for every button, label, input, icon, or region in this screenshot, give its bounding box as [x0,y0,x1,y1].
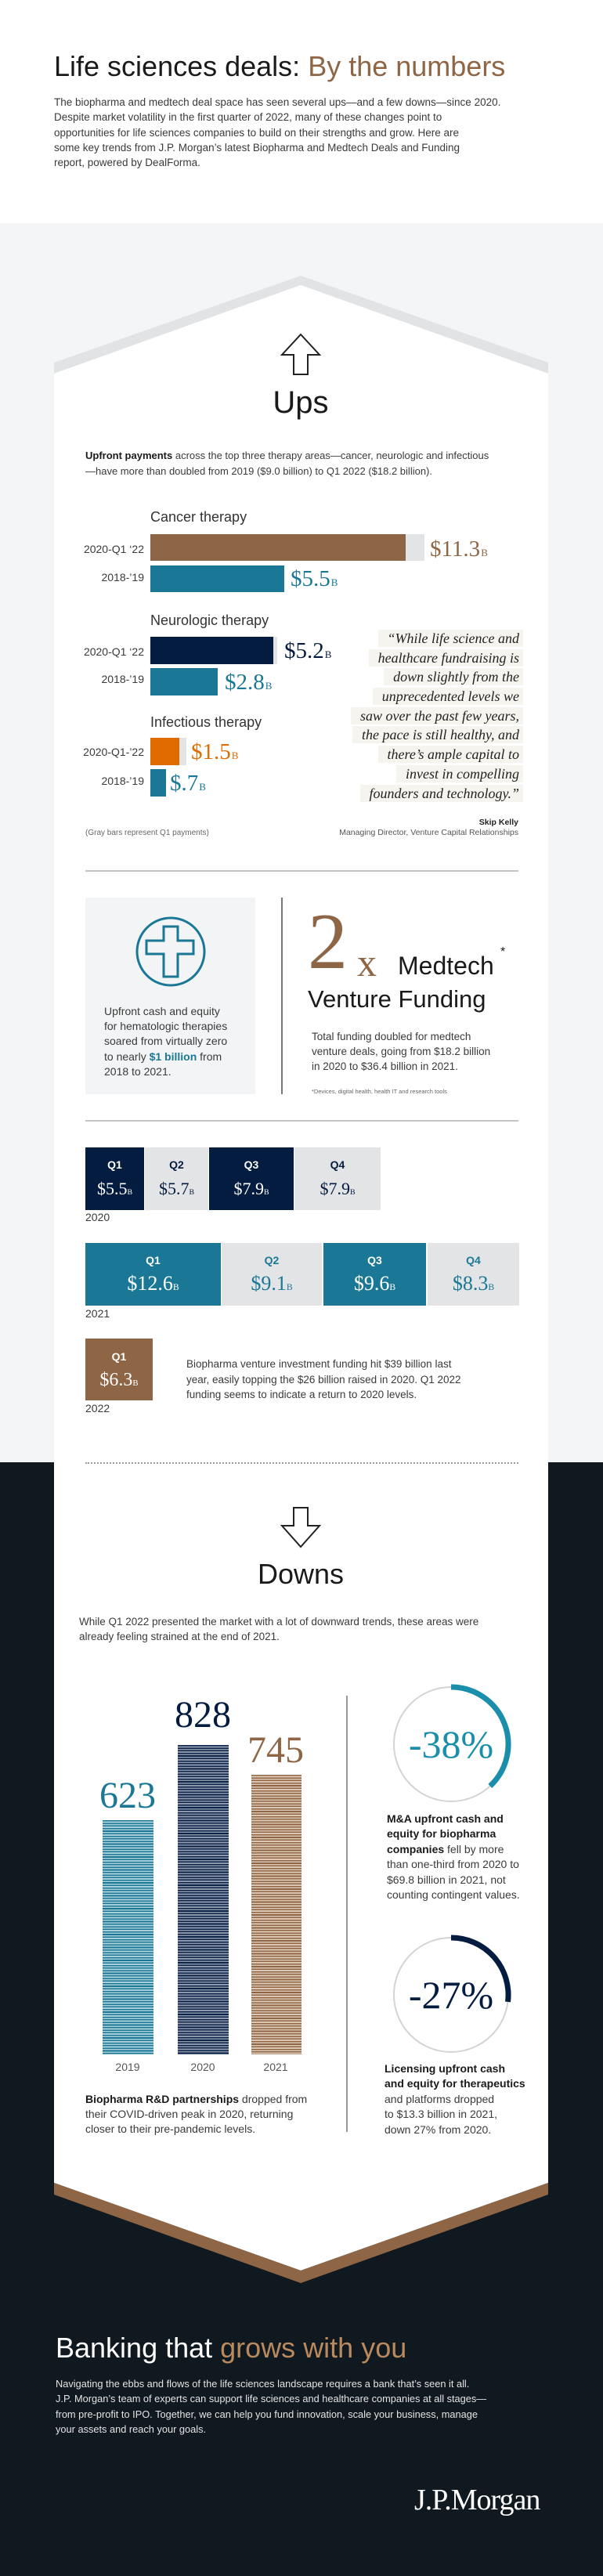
text: licensing upfront: and platforms dropped [385,2093,494,2105]
quote: unprecedented levels we [382,688,519,704]
bar chart: R&D partnerships: 623 [99,1775,156,1816]
text: licensing upfront [385,2062,525,2136]
footer paragraph: J.P. Morgan’s team of experts can support life sciences and healthcare companies at all stages— [56,2393,486,2404]
text: $11.3B [430,537,488,562]
note: gray bars: (Gray bars represent Q1 payments) [85,829,209,837]
label: 2021: 2021 [85,1307,110,1320]
callout: 2x medtech venture funding: Medtech [398,952,494,980]
bar chart: therapy upfront payments: 2018-’19 [102,775,144,787]
text: licensing upfront: Licensing upfront cash [385,2062,505,2075]
chart: 2021 quarterly funding: $9.1B [251,1272,293,1295]
text: M&A upfront [387,1812,520,1901]
chart: -27% ring: -27% [409,1973,493,2017]
callout: 2x medtech venture funding: venture deals, going from $18.2 billion [312,1046,490,1057]
callout: 2x medtech venture funding [308,898,505,1095]
label: 2022: 2022 [85,1402,110,1414]
text: hematologic: Upfront cash and equity [104,1005,220,1017]
callout: 2x medtech venture funding: Venture Funding [308,985,486,1013]
quote: saw over the past few years, [360,708,519,724]
bar chart: R&D partnerships: 2019 [115,2061,140,2073]
quote attribution: Managing Director, Venture Capital Relationships [339,828,518,837]
text: biopharma R&D partnerships: their COVID-driven peak in 2020, returning [85,2108,293,2120]
chart: 2022 Q1: $6.3B [99,1370,139,1390]
text: licensing upfront: down 27% from 2020. [385,2123,491,2136]
callout: 2x medtech venture funding: *Devices, digital health, health IT and research tools [312,1088,447,1095]
bar chart: therapy upfront payments: $2.8B [225,670,272,695]
intro paragraph [54,96,500,168]
bar chart: therapy upfront payments: 2020-Q1 ‘22 [84,543,144,555]
heading: Ups: Ups [273,385,329,420]
intro paragraph: The biopharma and medtech deal space has seen several ups—and a few downs—since 2020. [54,96,500,108]
text: hematologic: soared from virtually zero [104,1035,227,1047]
text: M&A upfront: equity for biopharma [387,1827,496,1840]
quote attribution: Skip Kelly [479,818,518,827]
text: biopharma R&D partnerships: closer to their pre-pandemic levels. [85,2123,255,2135]
text: biopharma venture funding: funding seems to indicate a return to 2020 levels. [186,1389,417,1400]
chart: -27% ring [393,1935,511,2053]
label: cancer therapy: Cancer therapy [150,509,247,525]
heading: Downs: Downs [258,1558,344,1590]
chart: 2022 Q1: Q1 [112,1350,126,1363]
text: biopharma venture funding [186,1358,460,1400]
chart: 2021 quarterly funding [85,1243,519,1306]
text: biopharma venture funding: Biopharma venture investment funding hit $39 billion last [186,1358,451,1370]
label: infectious therapy: Infectious therapy [150,714,262,730]
label: 2020: 2020 [85,1211,110,1223]
footer paragraph [56,2378,487,2435]
text: hematologic: 2018 to 2021. [104,1065,172,1078]
chart: 2021 quarterly funding: $12.6B [127,1272,179,1295]
chart: 2020 quarterly funding: $5.7B [159,1179,194,1198]
chart: 2021 quarterly funding: $8.3B [453,1272,494,1295]
bar chart: R&D partnerships: 2021 [263,2061,288,2073]
chart: 2020 quarterly funding: Q1 [107,1158,122,1171]
chart: 2020 quarterly funding: Q4 [330,1158,345,1171]
text: hematologic: for hematologic therapies [104,1020,227,1032]
chart: 2020 quarterly funding: $5.5B [97,1179,132,1198]
bar chart: therapy upfront payments: 2020-Q1-’22 [83,746,144,758]
text: M&A upfront: than one-third from 2020 to [387,1858,519,1870]
bar chart: therapy upfront payments: $5.5B [291,566,338,591]
text: hematologic: to nearly $1 billion from [104,1050,222,1063]
chart: -38% ring [393,1684,511,1802]
chart: 2020 quarterly funding: $7.9B [233,1179,269,1198]
intro paragraph: opportunities for life sciences companies to build on their strengths and grow. Here are [54,127,459,139]
quote: there’s ample capital to [388,746,519,762]
bar chart: therapy upfront payments: 2018-’19 [102,673,144,685]
text: M&A upfront: $69.8 billion in 2021, not [387,1873,506,1886]
bar chart: therapy upfront payments: $.7B [170,771,206,796]
callout: 2x medtech venture funding: Total funding doubled for medtech [312,1031,471,1042]
bar chart: R&D partnerships [99,1694,304,2073]
chart: 2020 quarterly funding: Q3 [244,1158,258,1171]
quote: the pace is still healthy, and [362,727,519,742]
text: M&A upfront: counting contingent values. [387,1888,520,1901]
logo: J.P.Morgan: J.P.Morgan [414,2484,540,2516]
title: Life sciences deals: By the numbers [54,50,505,82]
bar chart: R&D partnerships: 2020 [190,2061,215,2073]
ups intro text: Upfront payments across the top three therapy areas—cancer, neurologic and infectious [85,450,489,461]
chart: -38% ring: -38% [409,1722,493,1766]
downs intro text: While Q1 2022 presented the market with a lot of downward trends, these areas were [79,1616,478,1628]
intro paragraph: Despite market volatility in the first quarter of 2022, many of these changes point to [54,111,442,123]
quote: founders and technology.” [370,785,519,800]
chart: 2020 quarterly funding [85,1147,381,1210]
chart: 2021 quarterly funding: Q3 [367,1254,382,1266]
chart: 2022 Q1 [85,1339,153,1400]
quote: down slightly from the [393,669,519,685]
quote: healthcare fundraising is [378,650,519,666]
panel: hematologic therapies [85,898,255,1094]
bar chart: therapy upfront payments: $1.5B [191,739,238,764]
intro paragraph: report, powered by DealForma. [54,157,200,168]
callout: 2x medtech venture funding: * [500,945,505,959]
quote: invest in compelling [406,766,519,782]
label: neurologic therapy: Neurologic therapy [150,612,269,628]
ups intro text: —have more than doubled from 2019 ($9.0 billion) to Q1 2022 ($18.2 billion). [85,465,432,477]
text: biopharma venture funding: year, easily topping the $26 billion raised in 2020. Q1 2022 [186,1374,460,1385]
bar chart: therapy upfront payments [83,509,488,837]
chart: 2020 quarterly funding: Q2 [169,1158,184,1171]
chart: 2021 quarterly funding: Q4 [466,1254,481,1266]
text: licensing upfront: and equity for therapeutics [385,2077,525,2090]
icon: up arrow [280,334,321,375]
text: biopharma R&D partnerships [85,2093,307,2135]
chart: 2021 quarterly funding: Q2 [265,1254,279,1266]
quote attribution [339,818,518,837]
text: hematologic [104,1005,227,1078]
footer paragraph: from pre-profit to IPO. Together, we can help you fund innovation, scale your business, manage [56,2408,478,2420]
quote: “While life science and [388,630,519,646]
footer heading: Banking that grows with you [56,2332,406,2364]
bar chart: R&D partnerships: 828 [175,1694,231,1736]
footer paragraph: Navigating the ebbs and flows of the life sciences landscape requires a bank that’s seen it all. [56,2378,469,2390]
chart: 2021 quarterly funding: $9.6B [354,1272,395,1295]
icon: down arrow [280,1507,321,1548]
downs intro text: already feeling strained at the end of 2021. [79,1631,280,1642]
quote [351,630,523,802]
text: M&A upfront: M&A upfront cash and [387,1812,504,1825]
chart: 2021 quarterly funding: Q1 [146,1254,161,1266]
chart: 2020 quarterly funding: $7.9B [320,1179,356,1198]
bar chart: therapy upfront payments: 2018-’19 [102,571,144,583]
downs intro text [79,1616,478,1642]
footer paragraph: your assets and reach your goals. [56,2423,206,2435]
intro paragraph: some key trends from J.P. Morgan’s latest Biopharma and Medtech Deals and Funding [54,142,460,154]
text: biopharma R&D partnerships: Biopharma R&D partnerships dropped from [85,2093,307,2105]
callout: 2x medtech venture funding: x [357,941,377,985]
bar chart: therapy upfront payments: $5.2B [284,638,331,663]
ups intro text [85,450,489,477]
text: M&A upfront: companies fell by more [387,1843,504,1855]
bar chart: therapy upfront payments: 2020-Q1 ‘22 [84,645,144,658]
text: licensing upfront: to $13.3 billion in 2021, [385,2108,497,2120]
bar chart: R&D partnerships: 745 [247,1729,304,1771]
callout: 2x medtech venture funding: 2 [308,898,348,986]
callout: 2x medtech venture funding: in 2020 to $36.4 billion in 2021. [312,1060,458,1072]
icon: medical cross [136,916,205,987]
